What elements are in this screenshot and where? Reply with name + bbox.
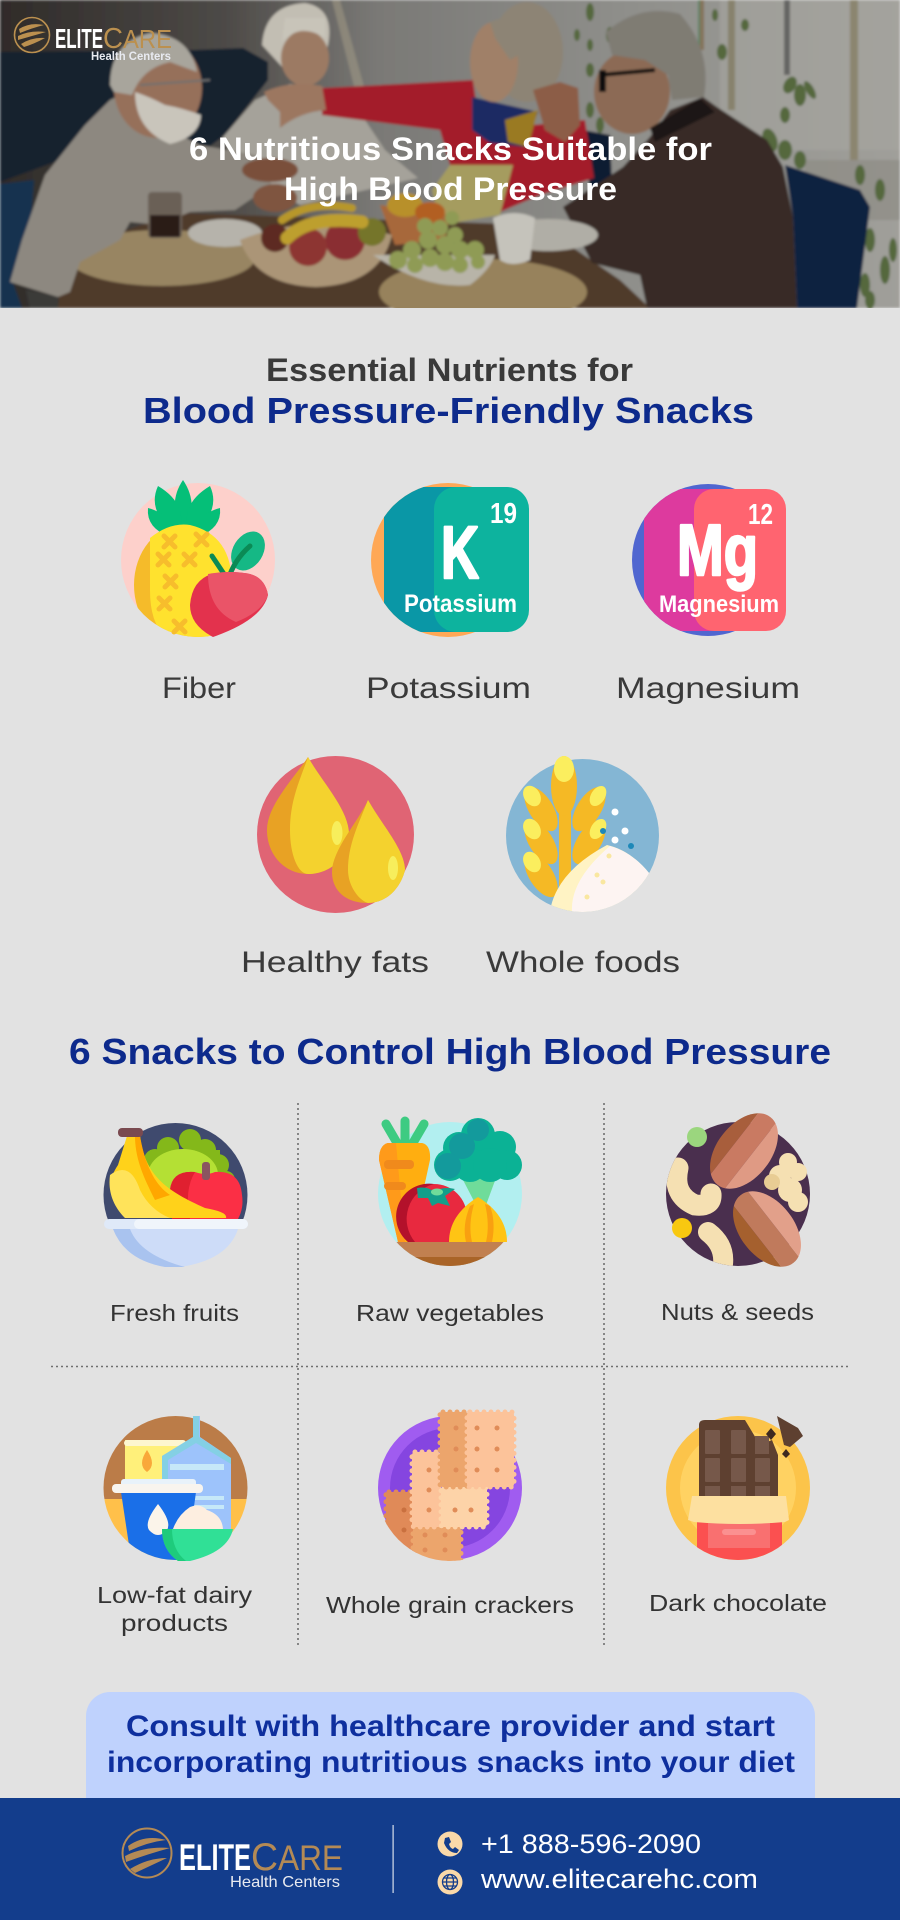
callout: consult with provider — [86, 1692, 815, 1822]
glass bowl with oranges — [380, 205, 450, 245]
icon: raw vegetables — [378, 1118, 522, 1270]
icon: whole grain crackers — [378, 1412, 522, 1563]
logo: top left: Health Centers — [91, 49, 171, 63]
label: Nuts and seeds: Nuts & seeds — [661, 1299, 814, 1325]
heading: 6 snacks: 6 Snacks to Control High Blood Pressure — [69, 1031, 831, 1072]
label: Whole foods: Whole foods — [486, 946, 680, 979]
label: Raw vegetables: Raw vegetables — [356, 1300, 544, 1326]
icon: low-fat dairy — [104, 1416, 248, 1561]
label: Magnesium: Magnesium — [616, 672, 800, 705]
icon: magnesium: Magnesium — [659, 591, 779, 618]
callout: consult with provider: incorporating nutritious snacks into your diet — [107, 1746, 795, 1779]
icon: potassium: K — [441, 511, 479, 594]
icon: fresh fruits — [100, 1120, 250, 1267]
hand holding — [242, 158, 298, 182]
label: Low-fat dairy products: Low-fat dairy — [97, 1582, 253, 1608]
icon: potassium — [371, 483, 529, 637]
label: Healthy fats: Healthy fats — [241, 946, 429, 979]
icon: potassium: 19 — [490, 498, 517, 530]
label: Low-fat dairy products — [97, 1582, 253, 1636]
navy chair behind — [583, 130, 612, 190]
right man — [563, 97, 797, 308]
title: High Blood Pressure — [284, 171, 617, 207]
heading: essential nutrients: Essential Nutrients for — [266, 352, 633, 388]
logo: footer: Health Centers — [230, 1874, 340, 1891]
label: Potassium: Potassium — [366, 672, 531, 705]
window blinds — [332, 0, 900, 220]
logo: footer — [122, 1828, 343, 1891]
cup — [493, 213, 535, 264]
sofa — [0, 48, 268, 182]
red woman — [322, 80, 594, 212]
label: Whole grain crackers: Whole grain crackers — [326, 1592, 574, 1618]
left man shirt — [10, 90, 272, 297]
title — [189, 131, 712, 207]
website: www.elitecarehc.com — [480, 1864, 758, 1894]
heading: essential nutrients: Blood Pressure-Friendly Snacks — [143, 390, 754, 431]
label: Fresh fruits: Fresh fruits — [110, 1300, 239, 1326]
icon: globe — [438, 1870, 462, 1894]
icon: nuts and seeds — [666, 1113, 810, 1267]
icon: fiber — [121, 480, 275, 645]
heading: essential nutrients — [143, 352, 754, 431]
icon: healthy fats — [257, 756, 414, 913]
callout: consult with provider: Consult with healthcare provider and start — [126, 1710, 775, 1743]
panel: footer — [0, 1798, 900, 1920]
table — [58, 213, 650, 308]
logo: footer: ARE — [278, 1839, 343, 1878]
logo: top left: ARE — [123, 24, 172, 54]
back woman body — [222, 84, 418, 205]
plates — [188, 219, 262, 247]
label: Fiber: Fiber — [162, 672, 236, 705]
logo: top left: C — [103, 23, 123, 55]
icon: phone — [438, 1832, 462, 1856]
logo: top left — [14, 18, 172, 63]
photo: family at table — [0, 0, 900, 325]
place mats — [69, 230, 255, 286]
coffee glass — [148, 192, 182, 238]
chair — [785, 165, 870, 308]
icon: whole foods — [506, 756, 659, 912]
panel: hero photo banner — [0, 0, 900, 325]
title: 6 Nutritious Snacks Suitable for — [189, 131, 712, 167]
icon: magnesium — [632, 484, 786, 636]
phone number: +1 888-596-2090 — [481, 1829, 701, 1859]
logo: top left: ELITE — [55, 23, 103, 54]
grape bowl — [373, 255, 495, 286]
label: Dark chocolate: Dark chocolate — [649, 1590, 827, 1616]
logo: footer: C — [251, 1836, 278, 1879]
plants — [574, 3, 897, 309]
logo: footer: ELITE — [179, 1837, 251, 1878]
label: Low-fat dairy products: products — [121, 1610, 228, 1636]
icon: magnesium: 12 — [748, 499, 773, 531]
fruit bowl — [240, 224, 392, 287]
icon: magnesium: Mg — [677, 511, 758, 591]
icon: potassium: Potassium — [404, 590, 517, 618]
left man head — [112, 56, 204, 138]
icon: dark chocolate — [666, 1416, 810, 1565]
